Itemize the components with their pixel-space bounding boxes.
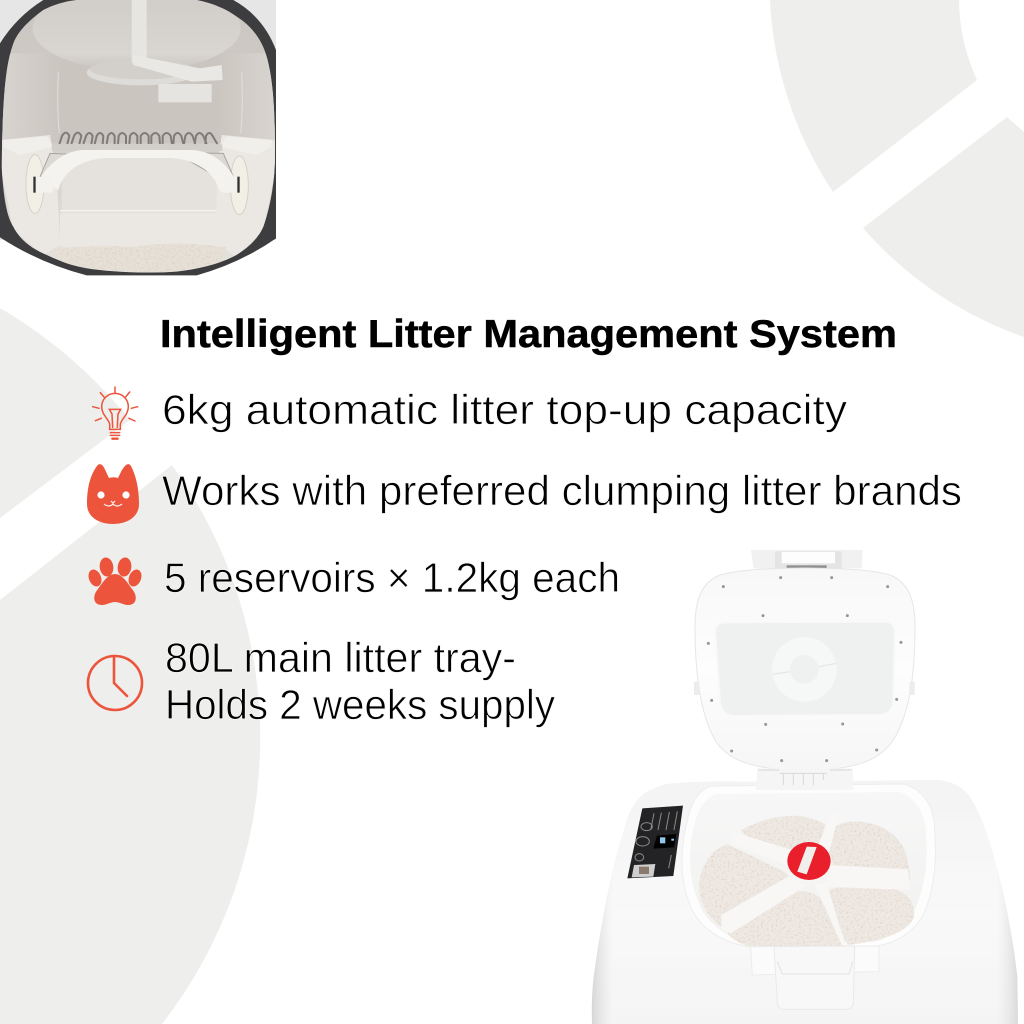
icon: clock <box>88 656 142 710</box>
front latch <box>751 946 879 1009</box>
lid shell <box>695 568 915 771</box>
wheels <box>26 155 44 213</box>
product: litter box body <box>592 780 1018 1024</box>
feature text: top-up capacity: 6kg automatic litter top-up capacity <box>162 386 847 433</box>
bowl opening <box>682 784 936 947</box>
title: Intelligent Litter Management System <box>160 313 897 356</box>
hinge bottom <box>756 768 853 790</box>
feature text: main litter tray: Holds 2 weeks supply <box>165 681 555 728</box>
feature text: clumping litter brands: Works with preferred clumping litter brands <box>162 467 962 514</box>
control panel label <box>627 806 683 878</box>
icon: cat face <box>87 464 139 524</box>
crossbar and arch <box>52 144 222 151</box>
background shapes: left circle <box>0 308 260 1024</box>
disc <box>772 637 837 702</box>
litter sectors <box>699 816 914 947</box>
side tabs <box>694 682 699 695</box>
icon: light bulb <box>93 387 138 439</box>
hinge top <box>751 550 863 568</box>
window <box>715 622 895 716</box>
feature text: reservoirs: 5 reservoirs × 1.2kg each <box>164 554 620 601</box>
icon: paw print <box>86 557 144 605</box>
product: open lid <box>694 550 915 790</box>
screws <box>707 576 902 762</box>
grids <box>40 152 68 177</box>
background shapes: top right circle <box>770 0 1024 337</box>
photo: interior of litter box <box>0 0 276 276</box>
feature text: main litter tray: 80L main litter tray- <box>165 634 516 681</box>
feature text: main litter tray <box>165 634 555 728</box>
red sticker <box>786 842 832 882</box>
wire rack <box>59 133 217 144</box>
litter <box>52 244 227 273</box>
paddles <box>721 812 910 946</box>
